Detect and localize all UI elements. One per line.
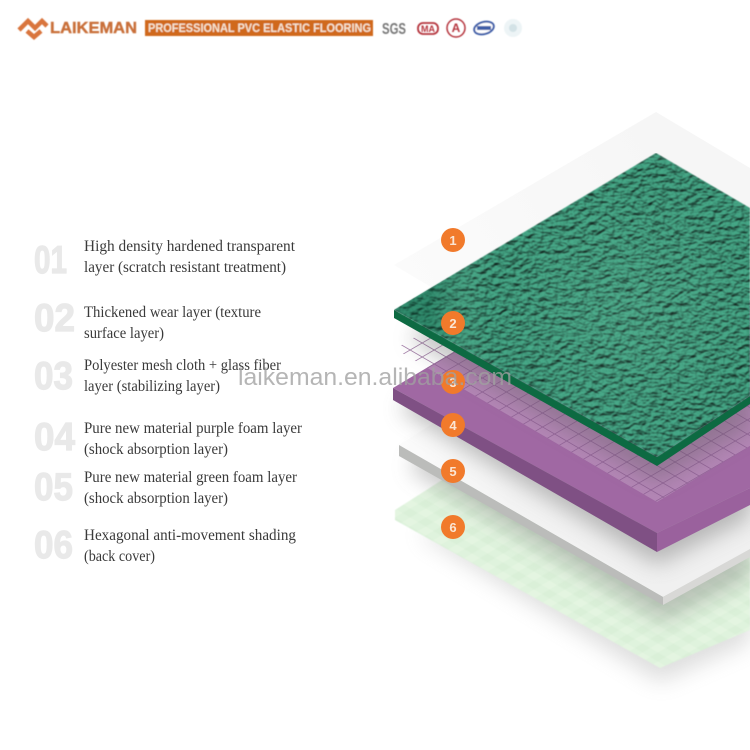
certification: MA: MA [421,24,435,34]
item 06 [34,524,296,567]
certification: MA [418,23,438,34]
item 02 [34,297,261,342]
certification: pale round seal [504,19,522,37]
number badge 3: 3 [449,375,457,390]
layer 3: polyester mesh cloth [395,192,750,502]
item 03 [34,355,282,398]
item 02: Thickened wear layer (texture [84,304,261,321]
item 01: 01 [34,239,67,282]
item 03: Polyester mesh cloth + glass fiber [84,357,282,374]
layer 5: white green-foam layer [399,400,750,622]
number badge 2 [441,311,465,335]
item 04: Pure new material purple foam layer [84,420,303,437]
layer 4: purple foam layer [393,230,750,565]
icon: Laikeman logo [19,21,47,37]
item 01 [34,238,296,282]
item 02: 02 [34,297,75,340]
certification: blue oval [473,20,495,36]
layer 6: green hexagonal back cover [395,475,750,682]
item 05: 05 [34,466,73,509]
item 04 [34,416,303,459]
item 01: High density hardened transparent [84,238,296,255]
layer 1: transparent hardened layer [394,112,750,340]
item 02: surface layer) [84,325,164,342]
item 03: layer (stabilizing layer) [84,378,220,395]
number badge 4: 4 [449,418,457,433]
banner: professional flooring: PROFESSIONAL PVC ELASTIC FLOORING [148,23,371,35]
watermark: laikeman.en.alibaba.com [238,364,512,391]
exploded flooring layers diagram [393,112,750,682]
number badge 4 [441,413,465,437]
header brand bar [19,19,522,38]
number badge 2: 2 [449,316,457,331]
number badge 3 [441,370,465,394]
item 05: (shock absorption layer) [84,490,228,507]
number badge 5 [441,459,465,483]
number badge 1: 1 [449,233,457,248]
item 05: Pure new material green foam layer [84,469,298,486]
item 04: 04 [34,416,75,459]
layer 2: green wear layer [394,153,750,482]
layer description list [34,238,303,567]
certification: CNAS circle [447,19,465,37]
item 05 [34,466,298,509]
item 06: 06 [34,524,73,567]
item 04: (shock absorption layer) [84,441,228,458]
item 06: Hexagonal anti-movement shading [84,527,296,544]
number badge 1 [441,228,465,252]
item 03: 03 [34,355,73,398]
brand name: LAIKEMAN [50,20,137,37]
certification: SGS: SGS [382,21,406,38]
certification: CNAS circle: A [452,21,461,35]
item 01: layer (scratch resistant treatment) [84,259,286,276]
number badge 6: 6 [449,520,457,535]
item 06: (back cover) [84,548,155,565]
number badge 6 [441,515,465,539]
number badge 5: 5 [449,464,457,479]
